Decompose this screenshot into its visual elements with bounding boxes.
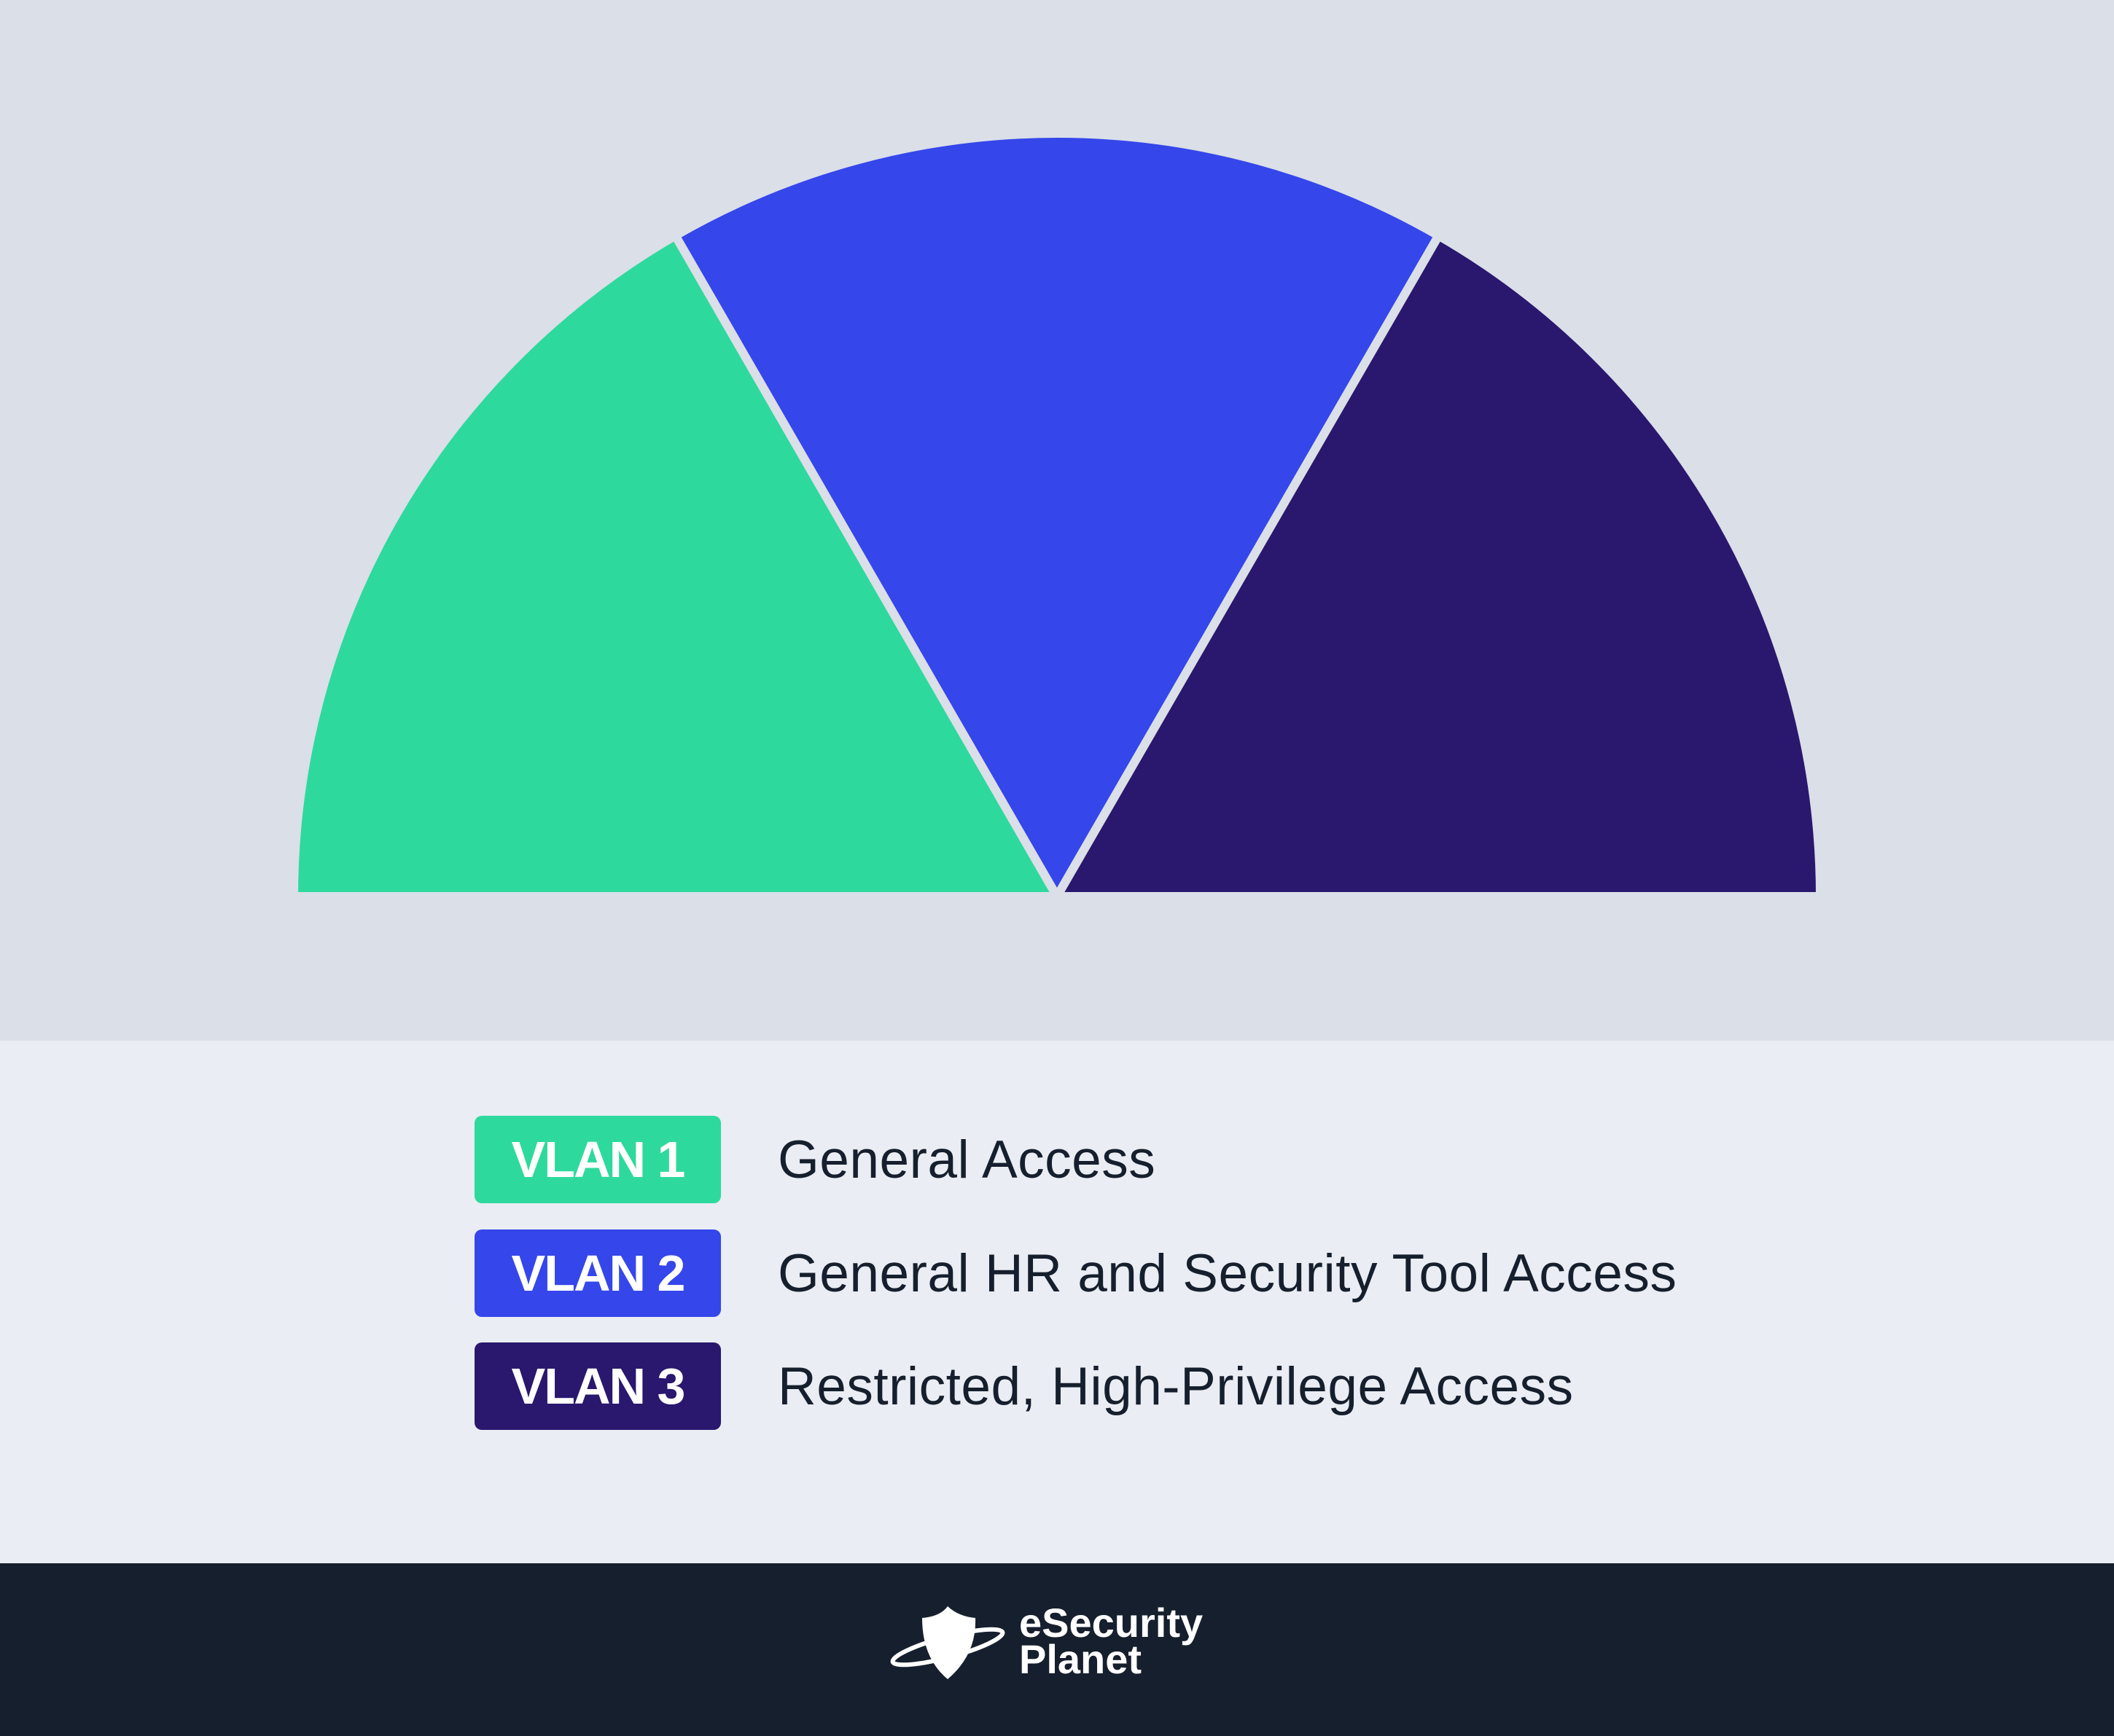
badge: VLAN 1 bbox=[475, 1116, 721, 1203]
logo text: Planet bbox=[1019, 1636, 1142, 1682]
badge: VLAN 3 bbox=[475, 1342, 721, 1430]
logo text bbox=[1019, 1600, 1203, 1682]
semicircle chart bbox=[298, 138, 1816, 892]
badge: VLAN 1: VLAN 1 bbox=[512, 1131, 684, 1188]
label: Restricted: Restricted, High-Privilege Access bbox=[778, 1357, 1574, 1415]
segment: VLAN 3 bbox=[1057, 235, 1820, 896]
badge: VLAN 3: VLAN 3 bbox=[512, 1358, 684, 1415]
segment: VLAN 1 bbox=[294, 235, 1057, 896]
segment: VLAN 2 bbox=[675, 133, 1439, 896]
label: General HR: General HR and Security Tool Access bbox=[778, 1243, 1677, 1303]
icon: shield planet bbox=[891, 1606, 1005, 1679]
logo text: eSecurity bbox=[1019, 1600, 1203, 1646]
logo bbox=[891, 1600, 1203, 1682]
badge: VLAN 2: VLAN 2 bbox=[512, 1245, 684, 1302]
label: General Access: General Access bbox=[778, 1130, 1155, 1189]
badge: VLAN 2 bbox=[475, 1229, 721, 1317]
